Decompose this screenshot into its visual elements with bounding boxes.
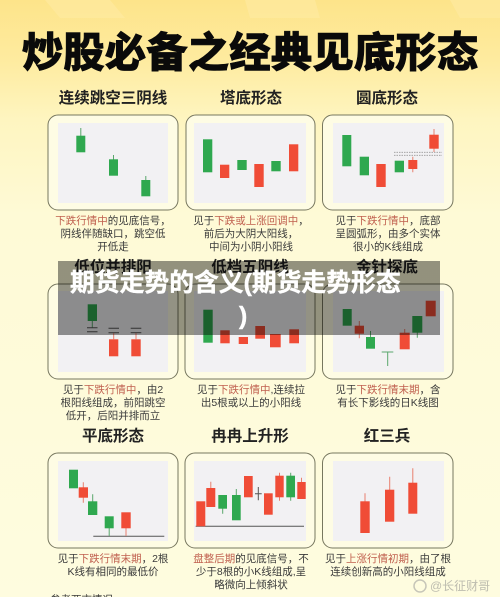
overlay title: ) [239,303,247,330]
panel: 塔底形态 [186,88,315,253]
description: 出5根或以上的小阳线 [201,396,302,409]
description: 有长下影线的日K线图 [337,396,439,409]
description: 见于下跌行情中，由2 [63,384,163,396]
heading: 红三兵: 红三兵 [364,426,410,445]
panel: 连续跳空三阴线 [48,88,178,253]
description: 前后为大阴大阳线， [204,227,298,240]
heading: 圆底形态: 圆底形态 [356,88,418,107]
candlesticks [360,468,417,533]
card frame [322,453,453,548]
description: 见于下跌行情中，底部 [336,215,440,227]
description: 呈圆弧形，由多个实体 [336,227,441,240]
description: 连续创新高的小阳线组成 [330,565,446,578]
panel: 平底形态 [48,426,178,578]
overlay banner [58,261,440,335]
description: 见于下跌或上涨回调中， [193,215,309,227]
heading: 平底形态: 平底形态 [82,426,144,445]
description: 开低走 [97,240,129,253]
description: 盘整后期的见底信号，不 [193,553,309,565]
description: 少于8根的小K线组成,呈 [196,565,306,578]
description: 下跌行情中的见底信号， [55,215,171,227]
candlesticks [69,470,164,536]
heading: 低位并排阳: 低位并排阳 [74,257,152,276]
panel: 冉冉上升形 [185,427,315,591]
description: 中间为小阴小阳线 [209,240,293,253]
description: 见于上涨行情初期，由了根 [325,553,451,565]
description: 见于下跌行情中,连续拉 [197,384,305,396]
candlesticks [342,129,442,187]
description: 很小的K线组成 [353,240,423,253]
heading: 连续跳空三阴线: 连续跳空三阴线 [59,88,168,107]
candlesticks [76,128,150,196]
panel: 低位并排阳 [48,257,178,422]
heading: 金针探底: 金针探底 [356,257,418,276]
panel: 红三兵 [322,426,453,578]
watermark: @长征财哥 [430,579,490,593]
candlesticks [203,310,299,347]
description: 略微向上倾斜状 [214,578,288,591]
candlesticks [196,473,306,526]
panel: 圆底形态 [322,88,453,253]
description: 根阳线组成，前阳跳空 [60,396,166,409]
overlay title: 期货走势的含义(期货走势形态 [70,269,401,297]
heading: 低档五阳线: 低档五阳线 [211,257,289,276]
card frame [186,115,315,210]
description: 见于下跌行情末期，2根 [58,553,168,565]
card frame [322,115,453,210]
card frame [48,453,178,548]
card frame [185,284,315,379]
card frame [48,284,178,379]
card frame [322,284,453,379]
heading: 塔底形态: 塔底形态 [220,88,282,107]
candlesticks [343,301,436,366]
heading: 冉冉上升形: 冉冉上升形 [211,427,289,445]
description: K线有相同的最低价 [67,565,159,578]
title: 炒股必备之经典见底形态 [22,29,478,76]
description: 低开，后阳并排而立 [66,409,160,422]
panel: 低档五阳线 [185,257,315,409]
description: 见于下跌行情末期，含 [336,384,440,396]
card frame [48,115,178,210]
panel: 金针探底 [322,257,453,409]
description: 阴线伴随缺口，跳空低 [60,227,166,240]
candlesticks [87,304,141,356]
candlesticks [203,139,298,187]
card frame [185,453,315,548]
